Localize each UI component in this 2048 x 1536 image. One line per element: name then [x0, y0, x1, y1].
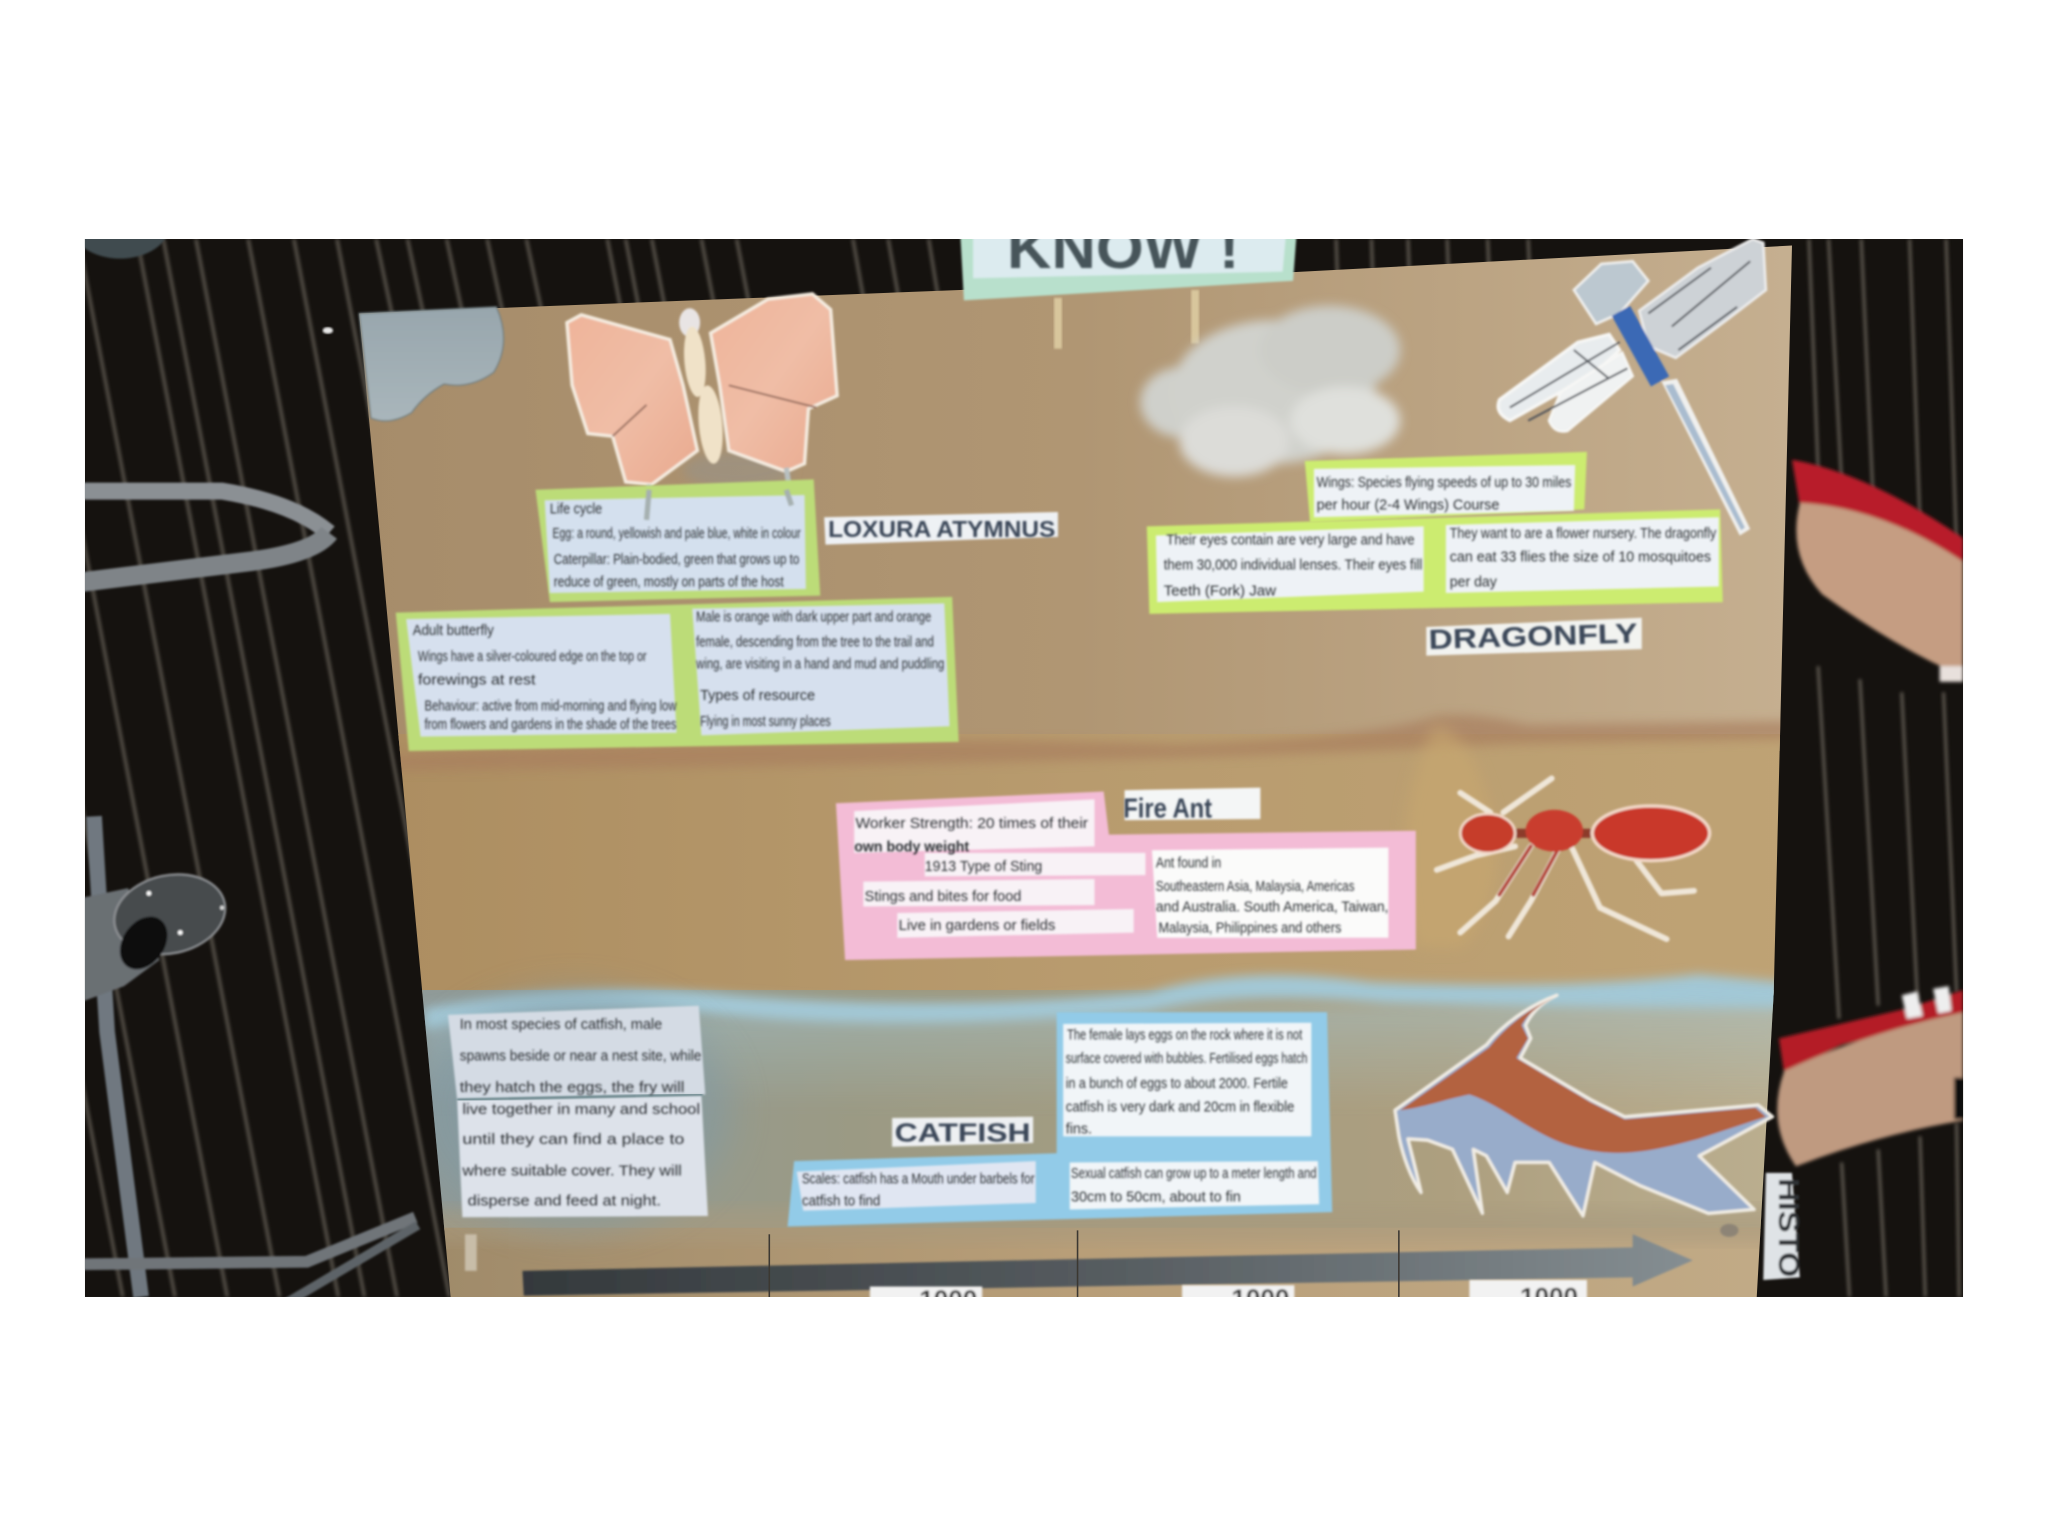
habitat text: Malaysia, Philippines and others — [1159, 920, 1341, 937]
body text lower right — [1071, 1165, 1317, 1206]
butterfly hind wing tails over panel — [647, 490, 792, 520]
strength text — [854, 815, 1088, 934]
wing text: per hour (2-4 Wings) Course — [1317, 496, 1499, 513]
habitat text: Southeastern Asia, Malaysia, Americas — [1156, 878, 1354, 895]
life cycle text: Life cycle — [550, 500, 602, 517]
corner pins — [465, 1224, 1738, 1271]
life cycle text: reduce of green, mostly on parts of the host — [554, 573, 784, 590]
habitat text: can eat 33 flies the size of 10 mosquitoes — [1450, 549, 1711, 566]
chair frame and knob — [71, 191, 418, 1306]
adult text left: Behaviour: active from mid-morning and flying low — [424, 698, 677, 715]
title text: KNOW ! — [1007, 217, 1240, 281]
eggs text: in a bunch of eggs to about 2000. Fertile — [1066, 1075, 1288, 1092]
wing text — [1317, 474, 1571, 513]
panel: fire ant facts — [836, 792, 1416, 960]
eye text: them 30,000 individual lenses. Their eyes fill — [1164, 556, 1422, 573]
body text lower left: Scales: catfish has a Mouth under barbels for — [802, 1170, 1034, 1187]
person's arm, lower — [1777, 986, 1964, 1166]
icon: dragonfly — [1498, 239, 1766, 536]
body text lower right: Sexual catfish can grow up to a meter length and — [1071, 1165, 1317, 1182]
timeline year labels: 1000 — [919, 1285, 977, 1315]
timeline year labels: 1000 — [1520, 1282, 1578, 1312]
timeline — [522, 1230, 1693, 1315]
eye text: Their eyes contain are very large and have — [1166, 532, 1415, 549]
habitat text: per day — [1450, 573, 1497, 590]
life cycle text: Caterpillar: Plain-bodied, green that grows up to — [554, 551, 799, 568]
life cycle text — [550, 500, 801, 590]
body text lower right: 30cm to 50cm, about to fin — [1071, 1189, 1241, 1206]
catfish behaviour text: In most species of catfish, male — [460, 1016, 662, 1033]
eggs text: surface covered with bubbles. Fertilised eggs hatch — [1066, 1050, 1307, 1067]
catfish behaviour text: they hatch the eggs, the fry will — [460, 1079, 684, 1096]
water shading — [418, 993, 731, 1228]
photo contents — [0, 191, 1964, 1315]
label: Catfish: CATFISH — [895, 1118, 1031, 1148]
body text lower left: catfish to find — [802, 1193, 880, 1210]
label: Fire Ant: Fire Ant — [1123, 793, 1212, 824]
catfish behaviour text: disperse and feed at night. — [468, 1193, 661, 1210]
adult text left: forewings at rest — [418, 671, 536, 688]
side strip with cut-off HISTORY label — [1763, 1173, 1804, 1280]
catfish behaviour text: live together in many and school — [462, 1101, 700, 1118]
photo of insect poster board on carpet — [84, 239, 1964, 1297]
grey-blue painted cloud — [359, 307, 504, 421]
water section — [340, 990, 1816, 1232]
water fade — [426, 1002, 1774, 1086]
icon: butterfly — [564, 290, 840, 487]
eggs text — [1066, 1027, 1307, 1138]
habitat text: Ant found in — [1156, 854, 1221, 871]
sky section — [340, 235, 1816, 751]
catfish behaviour text: until they can find a place to — [462, 1131, 684, 1148]
panel: butterfly adult facts — [396, 597, 959, 751]
eye text: Teeth (Fork) Jaw — [1164, 583, 1276, 600]
wing text: Wings: Species flying speeds of up to 30 miles — [1317, 474, 1571, 491]
eggs text: The female lays eggs on the rock where it is not — [1067, 1027, 1303, 1044]
bottom timeline section — [444, 1228, 1761, 1297]
catfish behaviour text: spawns beside or near a nest site, while — [460, 1048, 701, 1065]
label: Fire Ant — [1123, 788, 1260, 824]
adult text right: female, descending from the tree to the trail and — [696, 634, 934, 651]
strength text: Worker Strength: 20 times of their — [856, 815, 1088, 832]
band blending — [340, 1208, 1816, 1242]
habitat text: They want to are a flower nursery. The dragonfly — [1450, 525, 1717, 542]
panel: catfish left text sheets — [448, 1006, 708, 1217]
adult text right: Flying in most sunny places — [700, 713, 831, 730]
icon: fire ant — [1437, 778, 1710, 939]
icon: catfish — [1395, 995, 1772, 1216]
dark striped carpet — [0, 239, 1963, 1297]
person's arm, upper — [1792, 460, 1963, 682]
habitat text — [1450, 525, 1717, 590]
cardboard poster board — [340, 235, 1816, 1306]
habitat text — [1156, 854, 1388, 937]
strength text: 1913 Type of Sting — [925, 858, 1042, 875]
timeline year labels — [870, 1280, 1587, 1315]
side strip with cut-off HISTORY label: HISTO — [1772, 1178, 1804, 1277]
adult text right — [695, 609, 944, 730]
title plaque — [958, 239, 1298, 350]
panel: dragonfly eye and habitat facts — [1147, 509, 1723, 614]
ant mound — [1426, 728, 1462, 760]
strength text: Stings and bites for food — [865, 888, 1021, 905]
catfish behaviour text: where suitable cover. They will — [461, 1163, 682, 1180]
strength text: own body weight — [854, 839, 969, 856]
ground surface strip — [392, 715, 1789, 771]
adult text right: Male is orange with dark upper part and orange — [696, 609, 931, 626]
eggs text: catfish is very dark and 20cm in flexible — [1066, 1099, 1294, 1116]
eggs text: fins. — [1066, 1121, 1092, 1138]
adult text right: wing, are visiting in a hand and mud and puddling — [695, 656, 944, 673]
habitat text: and Australia. South America, Taiwan, — [1156, 899, 1388, 916]
timeline arrow — [522, 1234, 1693, 1296]
adult text left: from flowers and gardens in the shade of the trees — [424, 716, 677, 733]
water surface wave — [424, 974, 1783, 1029]
catfish behaviour text — [460, 1016, 701, 1210]
panel: butterfly life cycle — [536, 479, 820, 602]
life cycle text: Egg: a round, yellowish and pale blue, white in colour — [552, 525, 801, 542]
icon: cotton cloud — [1140, 306, 1400, 477]
body text lower left — [802, 1170, 1034, 1210]
adult text left: Wings have a silver-coloured edge on the top or — [418, 648, 647, 665]
panel: catfish facts — [788, 1012, 1332, 1226]
adult text left: Adult butterfly — [413, 622, 494, 639]
panel: dragonfly wing facts — [1305, 452, 1587, 522]
eye text — [1164, 532, 1422, 600]
timeline year labels: 1000 — [1231, 1283, 1289, 1313]
adult text left — [413, 622, 677, 733]
label: Dragonfly: DRAGONFLY — [1428, 618, 1638, 655]
label: Loxura Atymnus: LOXURA ATYMNUS — [828, 516, 1055, 542]
ground section — [340, 734, 1816, 995]
adult text right: Types of resource — [700, 687, 815, 704]
strength text: Live in gardens or fields — [899, 917, 1055, 934]
